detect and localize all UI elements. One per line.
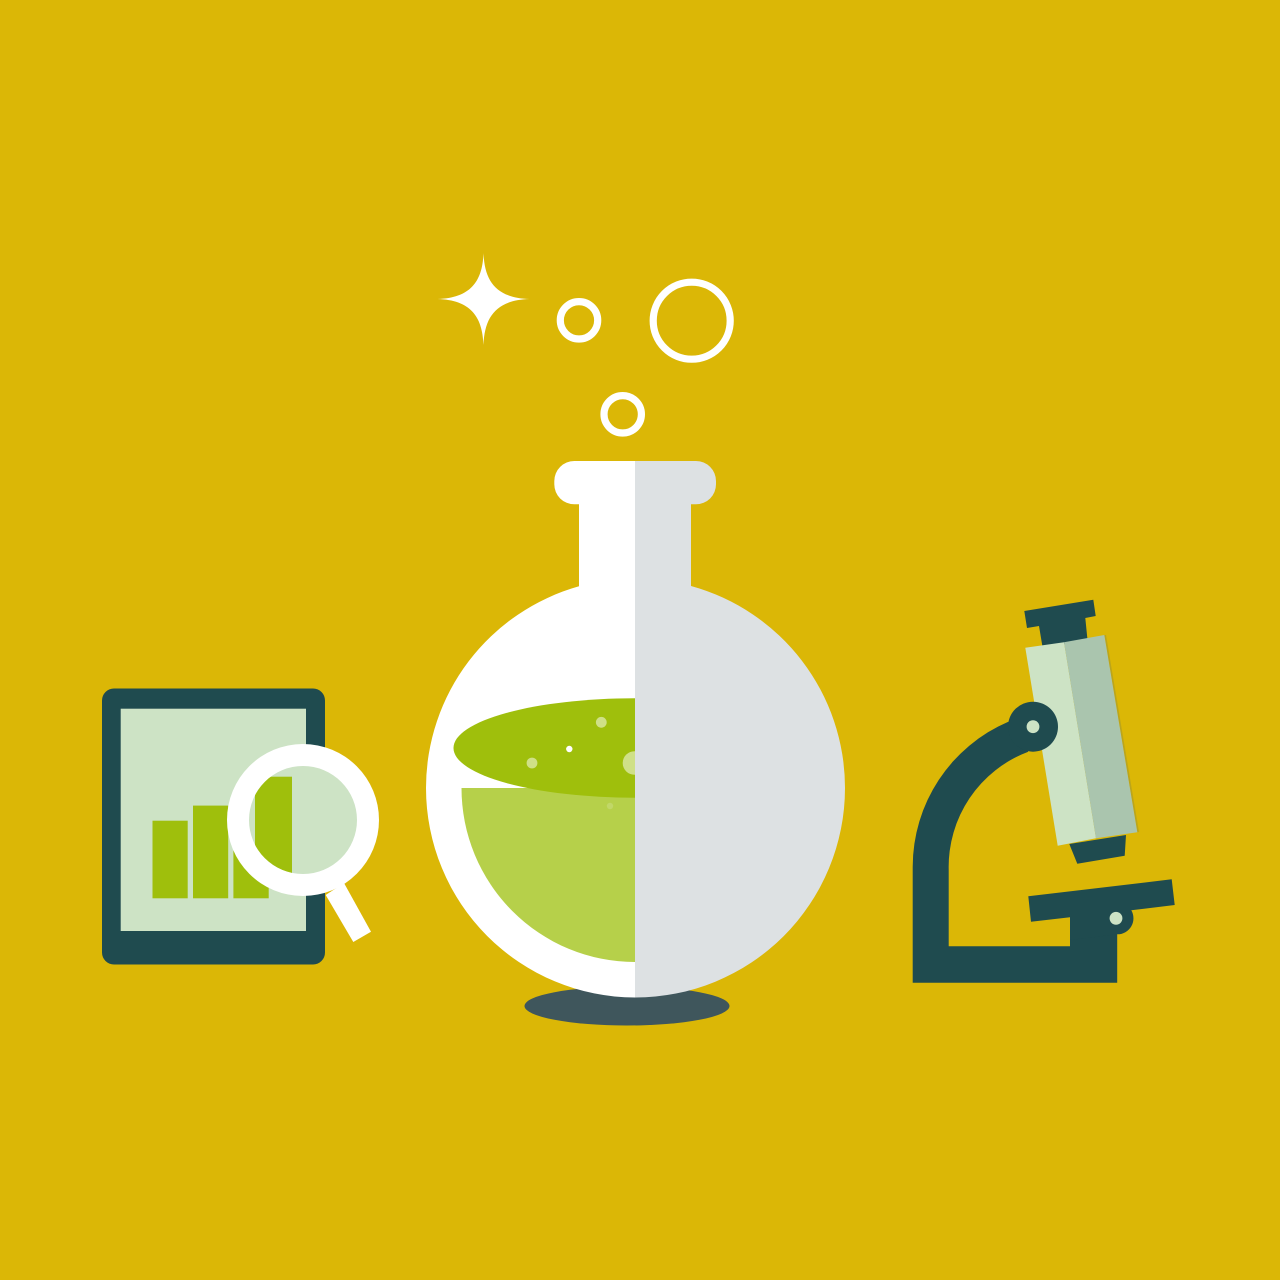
flask body left half: [426, 461, 635, 998]
icon: large bubble: [653, 282, 730, 359]
eyepiece: [1024, 600, 1096, 648]
arm and base: [913, 722, 1117, 983]
icon: sparkle star: [438, 253, 530, 345]
liquid bubbles: [527, 717, 646, 809]
lens: [249, 766, 357, 874]
flask body right half: [635, 461, 845, 998]
illustration: science lab on yellow background: [102, 254, 1175, 1026]
handle: [326, 883, 371, 942]
rim: [227, 744, 379, 896]
tablet body: [102, 688, 325, 964]
objective lens: [1069, 835, 1126, 864]
arm joint: [1008, 702, 1058, 752]
tube shadow: [1104, 635, 1139, 832]
icon: small bubble left: [560, 302, 598, 339]
round flask with liquid: [426, 461, 845, 998]
magnifying glass: [227, 744, 379, 942]
stage: [1028, 879, 1175, 940]
flask shadow: [524, 986, 730, 1026]
tube dark side: [1064, 635, 1137, 838]
microscope: [913, 600, 1175, 983]
liquid lower body: [461, 788, 635, 962]
bar chart: [152, 806, 269, 898]
liquid surface: [453, 698, 635, 798]
stage knob pin: [1110, 912, 1122, 925]
tube light side: [1025, 642, 1096, 846]
arm joint pin: [1027, 720, 1039, 733]
tablet with bar chart: [102, 688, 325, 964]
icon: small bubble above flask: [604, 396, 641, 433]
tablet screen: [121, 709, 306, 931]
magnified bar: [255, 776, 292, 873]
